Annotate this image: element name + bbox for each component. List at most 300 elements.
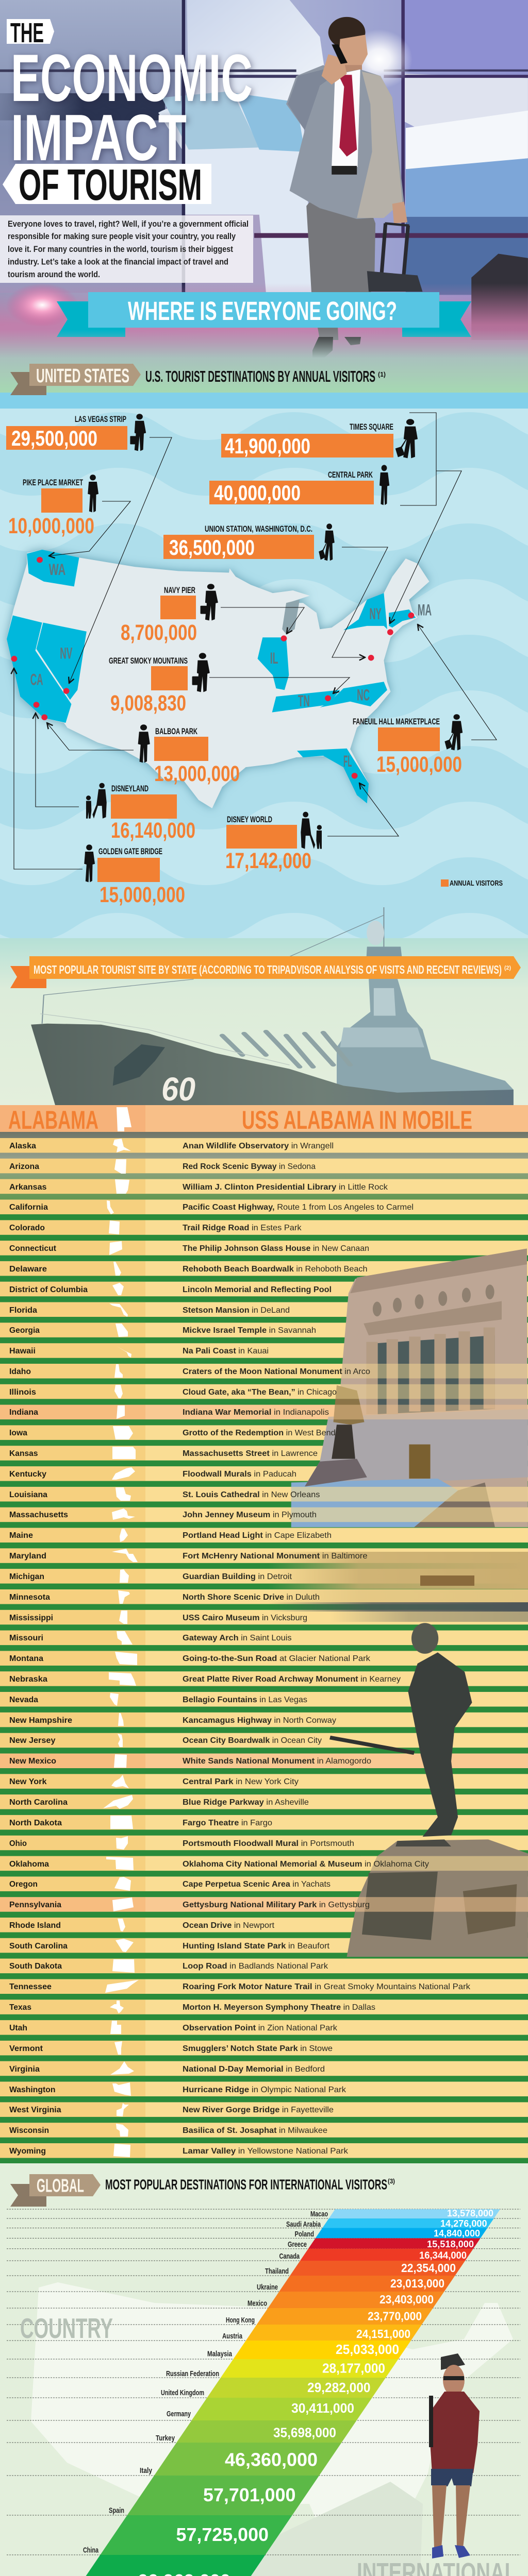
state: Massachusetts — [389, 609, 416, 628]
legend: annual visitors: ANNUAL VISITORS — [450, 879, 503, 888]
row: North Dakota — [9, 1816, 272, 1829]
title: THE: THE — [10, 18, 44, 48]
destination: Pike Place Market — [8, 474, 98, 538]
banner: United States — [10, 364, 141, 395]
row: Missouri — [9, 1631, 292, 1645]
row: Indiana: Indiana War Memorial in Indianapolis — [183, 1408, 329, 1417]
row: Arkansas: Arkansas — [9, 1183, 47, 1192]
row: Indiana — [9, 1405, 329, 1419]
row: Iowa: Iowa — [9, 1429, 27, 1437]
row: Idaho: Craters of the Moon National Monument in Arco — [183, 1367, 370, 1376]
banner: where is everyone going — [57, 292, 471, 337]
state labels: TN — [298, 691, 310, 710]
row: Maryland: Fort McHenry National Monument in Baltimore — [183, 1552, 368, 1561]
row: Minnesota: North Shore Scenic Drive in Duluth — [183, 1593, 320, 1602]
row: Nevada: Nevada — [9, 1696, 38, 1704]
row: Louisiana — [9, 1487, 320, 1501]
row: North Carolina: Blue Ridge Parkway in Asheville — [183, 1798, 309, 1807]
visitor counts: 29,282,000 — [307, 2380, 370, 2395]
destination: Central Park: 40,000,000 — [214, 481, 301, 505]
destination: Times Square: 41,900,000 — [225, 434, 310, 458]
state: California — [7, 615, 71, 723]
band: United States — [69, 2555, 265, 2576]
intro paragraph panel: Everyone loves to travel, right? Well, if you’re a government official — [8, 219, 249, 229]
row: Massachusetts: John Jenney Museum in Plymouth — [183, 1511, 317, 1519]
country labels: Mexico — [248, 2299, 267, 2308]
row: Vermont: Smugglers’ Notch State Park in Stowe — [183, 2044, 333, 2053]
country labels: Greece — [288, 2240, 307, 2249]
row: Kansas: Massachusetts Street in Lawrence — [183, 1449, 318, 1458]
band: Thailand — [290, 2261, 465, 2276]
table row backgrounds — [0, 1138, 528, 2158]
row: Montana: Montana — [9, 1654, 43, 1663]
visitor counts: 28,177,000 — [322, 2361, 385, 2376]
row: Texas: Texas — [9, 2003, 31, 2012]
row: California — [9, 1200, 414, 1214]
row: New Hampshire: New Hampshire — [9, 1716, 72, 1725]
photo: soldier statue on boulder — [330, 1623, 528, 1957]
country labels: Russian Federation — [166, 2369, 219, 2378]
row: Maine — [9, 1529, 332, 1542]
battleship section background — [0, 938, 528, 1108]
country labels: Saudi Arabia — [286, 2220, 321, 2229]
ship hull number 60: 60 — [161, 1071, 195, 1108]
visitor counts: 46,360,000 — [225, 2449, 318, 2470]
hero shoes — [312, 337, 361, 360]
row: Illinois — [9, 1385, 337, 1398]
row: Hawaii — [9, 1346, 269, 1358]
row: Delaware — [9, 1262, 368, 1276]
row: North Carolina: North Carolina — [9, 1798, 68, 1807]
visitor counts: 35,698,000 — [273, 2425, 336, 2440]
country labels: Turkey — [156, 2434, 175, 2443]
destination: Union Station: 36,500,000 — [169, 535, 255, 560]
row: New Hampshire — [9, 1713, 336, 1726]
row: Virginia — [9, 2061, 325, 2075]
row: Minnesota: Minnesota — [9, 1593, 50, 1602]
title: OF TOURISM: OF TOURISM — [19, 161, 202, 210]
destination: Disneyland — [86, 783, 195, 843]
row: California: California — [9, 1203, 48, 1212]
visitor counts — [63, 2208, 493, 2576]
row: Nebraska: Great Platte River Road Archway Monument in Kearney — [183, 1675, 401, 1684]
row: Kentucky: Kentucky — [9, 1470, 46, 1479]
state labels: CA — [30, 670, 43, 689]
chart: international visitors parallelogram bands — [29, 2209, 500, 2576]
country labels: Germany — [167, 2410, 191, 2418]
connector lines from destinations to map — [14, 413, 497, 869]
row: Ohio: Ohio — [9, 1839, 27, 1848]
row: District of Columbia — [9, 1283, 332, 1295]
destination: Disney World: DISNEY WORLD — [227, 815, 272, 824]
banner: where is everyone going: WHERE IS EVERYONE GOING? — [128, 296, 397, 326]
country labels: Malaysia — [207, 2349, 233, 2359]
country labels: United Kingdom — [161, 2388, 204, 2397]
destination: Las Vegas Strip — [6, 414, 146, 451]
row: Wyoming: Wyoming — [9, 2147, 46, 2156]
row: Connecticut: The Philip Johnson Glass House in New Canaan — [183, 1244, 369, 1253]
row: Nevada: Bellagio Fountains in Las Vegas — [183, 1696, 307, 1704]
row: South Dakota: Loop Road in Badlands National Park — [183, 1962, 328, 1971]
destination: Central Park — [209, 465, 389, 505]
row: Washington: Hurricane Ridge in Olympic National Park — [183, 2086, 346, 2094]
row: Florida: Stetson Mansion in DeLand — [183, 1306, 290, 1315]
row: Arizona: Arizona — [9, 1162, 39, 1171]
row: Alaska: Alaska — [9, 1142, 36, 1150]
axis label: country: COUNTRY — [20, 2312, 113, 2344]
visitor counts: 13,578,000 — [447, 2208, 493, 2218]
row: Rhode Island: Rhode Island — [9, 1921, 61, 1930]
row: New York: Central Park in New York City — [183, 1777, 299, 1786]
row: Florida: Florida — [9, 1306, 37, 1315]
hero background scene — [0, 0, 528, 393]
row: Kansas — [9, 1447, 318, 1459]
row: Pennsylvania: Pennsylvania — [9, 1901, 61, 1909]
row: Washington: Washington — [9, 2086, 56, 2094]
visitor counts: 57,701,000 — [203, 2484, 296, 2505]
band: Canada — [300, 2249, 473, 2261]
row: Tennessee: Roaring Fork Motor Nature Trail in Great Smoky Mountains National Park — [183, 1982, 471, 1991]
band: Germany — [192, 2398, 372, 2420]
row: Michigan — [9, 1569, 292, 1583]
row: Washington — [9, 2082, 346, 2096]
row: Nevada — [9, 1693, 307, 1706]
row: Georgia — [9, 1324, 316, 1337]
row: Kansas: Kansas — [9, 1449, 38, 1458]
location dots — [11, 557, 414, 778]
row: Arkansas: William J. Clinton Presidential Library in Little Rock — [183, 1183, 388, 1192]
row: District of Columbia: Lincoln Memorial and Reflecting Pool — [183, 1285, 332, 1294]
row: Oklahoma: Oklahoma — [9, 1860, 49, 1869]
row: Vermont — [9, 2041, 333, 2055]
destination: Las Vegas Strip: LAS VEGAS STRIP — [75, 414, 126, 424]
state: Nevada — [37, 623, 87, 700]
destination: Disney World: 17,142,000 — [225, 849, 311, 873]
rows: state names, icons and attractions — [9, 1139, 471, 2157]
row: Minnesota — [9, 1590, 320, 1604]
state: New York — [343, 593, 392, 634]
row: Nebraska: Nebraska — [9, 1675, 47, 1684]
row: Colorado — [9, 1221, 302, 1234]
state labels: WA — [49, 560, 65, 579]
destination: Times Square — [221, 419, 418, 458]
row: Mississippi: Mississippi — [9, 1614, 53, 1622]
row: Louisiana: Louisiana — [9, 1490, 47, 1499]
legend: annual visitors — [441, 879, 503, 888]
country labels: Ukraine — [257, 2283, 278, 2292]
row: South Carolina: South Carolina — [9, 1942, 68, 1951]
state labels: NC — [357, 686, 370, 704]
row: Delaware: Rehoboth Beach Boardwalk in Rehoboth Beach — [183, 1265, 368, 1274]
row: Michigan: Michigan — [9, 1572, 44, 1581]
row: Texas: Morton H. Meyerson Symphony Theatre in Dallas — [183, 2003, 375, 2012]
destination: Navy Pier: NAVY PIER — [164, 585, 195, 595]
row: Louisiana: St. Louis Cathedral in New Orleans — [183, 1490, 320, 1499]
row: Alaska: Anan Wildlife Observatory in Wrangell — [183, 1142, 334, 1150]
state: Florida — [297, 749, 369, 803]
map of the United States — [7, 550, 432, 808]
row: Maryland: Maryland — [9, 1552, 46, 1561]
band: China — [100, 2515, 292, 2555]
row: New Hampshire: Kancamagus Highway in North Conway — [183, 1716, 336, 1725]
destination: Golden Gate Bridge: 15,000,000 — [100, 883, 185, 907]
subtitle: most popular destinations — [105, 2176, 395, 2193]
destination: Union Station: UNION STATION, WASHINGTON, D.C. — [205, 524, 312, 534]
row: Georgia: Georgia — [9, 1326, 40, 1335]
row: Utah: Utah — [9, 2024, 27, 2032]
photo: landscape behind Michigan and Minnesota — [268, 1552, 528, 1622]
destination: Balboa Park — [138, 724, 240, 786]
row: Massachusetts — [9, 1509, 317, 1520]
destination: Golden Gate Bridge — [84, 844, 185, 907]
row: Connecticut: Connecticut — [9, 1244, 57, 1253]
banner: Global — [10, 2174, 101, 2207]
state: Washington — [27, 550, 79, 586]
section background: waves — [0, 409, 528, 938]
row: Georgia: Mickve Israel Temple in Savannah — [183, 1326, 316, 1335]
band: Ukraine — [279, 2276, 455, 2292]
global section background — [0, 2163, 528, 2576]
band: Greece — [308, 2238, 481, 2249]
green stripes behind table — [0, 1214, 528, 2163]
visitor counts: 24,151,000 — [356, 2327, 410, 2341]
row: Wyoming: Lamar Valley in Yellowstone National Park — [183, 2147, 349, 2156]
row: New York: New York — [9, 1777, 47, 1786]
row: Arizona — [9, 1159, 316, 1174]
destination: Golden Gate Bridge: GOLDEN GATE BRIDGE — [98, 846, 162, 856]
hero figure: businessman with phone and roller case — [286, 17, 423, 340]
country labels: Italy — [140, 2466, 153, 2475]
visitor counts: 23,403,000 — [380, 2293, 434, 2306]
row: South Carolina: Hunting Island State Park in Beaufort — [183, 1942, 330, 1951]
band: Poland — [316, 2228, 487, 2238]
state labels: FL — [343, 752, 352, 770]
visitor counts: 14,276,000 — [440, 2218, 487, 2229]
country labels: Macao — [310, 2210, 328, 2218]
row: Ohio — [9, 1836, 354, 1850]
row: New Jersey — [9, 1734, 322, 1747]
row: Iowa: Grotto of the Redemption in West Bend — [183, 1429, 336, 1437]
row: Iowa — [9, 1426, 336, 1439]
state: Illinois — [258, 637, 289, 690]
row: Oregon — [9, 1877, 331, 1891]
row: Oklahoma — [9, 1857, 429, 1870]
row: South Carolina — [9, 1939, 330, 1952]
intro paragraph panel: love it. For many countries in the world, tourism is their biggest — [8, 244, 233, 254]
visitor counts: 23,770,000 — [368, 2309, 422, 2323]
state: North Carolina — [320, 682, 387, 707]
state labels — [30, 560, 432, 770]
banner: most popular tourist site by state — [10, 956, 521, 988]
row: Mississippi: USS Cairo Museum in Vicksburg — [183, 1614, 307, 1622]
row: Oregon: Cape Perpetua Scenic Area in Yachats — [183, 1880, 331, 1889]
destination: Navy Pier — [121, 584, 218, 645]
row: Wyoming — [9, 2144, 349, 2157]
row: Nebraska — [9, 1672, 401, 1686]
row: Vermont: Vermont — [9, 2044, 43, 2053]
row: Kentucky: Floodwall Murals in Paducah — [183, 1470, 296, 1479]
row: Tennessee: Tennessee — [9, 1982, 52, 1991]
title: OF TOURISM — [3, 161, 211, 210]
row: Idaho: Idaho — [9, 1367, 31, 1376]
row: Maine: Maine — [9, 1531, 33, 1540]
destination: Balboa Park: BALBOA PARK — [155, 726, 197, 736]
row: Rhode Island — [9, 1919, 275, 1931]
row: Oregon: Oregon — [9, 1880, 38, 1889]
row: North Dakota: Fargo Theatre in Fargo — [183, 1819, 272, 1827]
row: District of Columbia: District of Columbia — [9, 1285, 88, 1294]
destination: Disneyland: 16,140,000 — [111, 818, 195, 843]
visitor counts: 23,013,000 — [390, 2277, 444, 2290]
visitor counts: 25,033,000 — [336, 2342, 399, 2357]
row: Virginia: Virginia — [9, 2065, 40, 2074]
country labels: Thailand — [265, 2267, 289, 2276]
destination: Navy Pier: 8,700,000 — [121, 620, 197, 645]
visitor counts: 22,354,000 — [401, 2261, 456, 2275]
row: Maine: Portland Head Light in Cape Elizabeth — [183, 1531, 332, 1540]
band: Spain — [127, 2476, 319, 2515]
country labels — [8, 2210, 328, 2576]
row: Maryland — [9, 1549, 368, 1562]
band: Macao — [329, 2209, 500, 2218]
row: Wisconsin: Wisconsin — [9, 2126, 49, 2135]
row: Hawaii: Hawaii — [9, 1347, 36, 1355]
state labels: MA — [418, 601, 432, 619]
state labels: NY — [369, 604, 382, 623]
row: South Dakota: South Dakota — [9, 1962, 62, 1971]
row: Michigan: Guardian Building in Detroit — [183, 1572, 292, 1581]
destination: Union Station — [163, 523, 335, 561]
intro paragraph panel: industry. Let’s take a look at the financial impact of travel and — [8, 257, 228, 267]
row: Colorado: Trail Ridge Road in Estes Park — [183, 1224, 302, 1232]
banner: most popular tourist site by state: (2) — [504, 965, 511, 971]
destination: Faneuil Hall Marketplace: FANEUIL HALL MARKETPLACE — [353, 717, 440, 726]
row: New Mexico: New Mexico — [9, 1757, 56, 1766]
country labels: China — [83, 2546, 98, 2554]
row: Texas — [9, 2001, 375, 2013]
destination: Faneuil Hall Marketplace: 15,000,000 — [376, 752, 462, 777]
row: Hawaii: Na Pali Coast in Kauai — [183, 1347, 269, 1355]
row: North Carolina — [9, 1795, 309, 1809]
row: Montana — [9, 1652, 371, 1665]
row: Wisconsin — [9, 2124, 327, 2137]
row: Mississippi — [9, 1611, 307, 1624]
state labels: NV — [60, 644, 73, 663]
band: Italy — [154, 2443, 341, 2476]
battleship USS Alabama — [31, 907, 514, 1107]
country labels: Austria — [222, 2332, 242, 2341]
ship base and grass behind first rows — [0, 1132, 528, 1215]
faded map behind chart — [31, 2282, 513, 2576]
subtitle: U.S. tourist destinations — [145, 367, 386, 385]
destination: Central Park: CENTRAL PARK — [328, 470, 373, 480]
row: Virginia: National D-Day Memorial in Bedford — [183, 2065, 325, 2074]
row: New Jersey: Ocean City Boardwalk in Ocean City — [183, 1736, 322, 1745]
destination: Times Square: TIMES SQUARE — [350, 422, 393, 432]
row: New Mexico — [9, 1754, 371, 1768]
row: Utah — [9, 2021, 338, 2034]
row: Colorado: Colorado — [9, 1224, 45, 1232]
row: Massachusetts: Massachusetts — [9, 1511, 68, 1519]
row: Idaho — [9, 1364, 370, 1378]
destination: Great Smoky Mountains: GREAT SMOKY MOUNTAINS — [109, 656, 188, 666]
band: Russian Federation — [221, 2359, 398, 2378]
intro paragraph panel: tourism around the world. — [8, 269, 100, 279]
row: Pennsylvania: Gettysburg National Military Park in Gettysburg — [183, 1901, 370, 1909]
row: Missouri: Gateway Arch in Saint Louis — [183, 1634, 292, 1642]
destination: Faneuil Hall Marketplace — [353, 714, 463, 777]
destination: Disneyland: DISNEYLAND — [111, 784, 148, 793]
visitor counts: 14,840,000 — [434, 2228, 480, 2239]
banner: Global: GLOBAL — [37, 2175, 84, 2196]
translucent rows over the memorial — [291, 1364, 528, 1522]
row: Utah: Observation Point in Zion National Park — [183, 2024, 338, 2032]
row: West Virginia — [9, 2103, 334, 2116]
row: North Dakota: North Dakota — [9, 1819, 62, 1827]
row: Delaware: Delaware — [9, 1265, 47, 1274]
row: South Dakota — [9, 1959, 328, 1973]
row: New Mexico: White Sands National Monument in Alamogordo — [183, 1757, 371, 1766]
table heading: Alabama: ALABAMA — [8, 1106, 98, 1134]
row: Connecticut — [9, 1241, 369, 1255]
row: West Virginia: West Virginia — [9, 2106, 61, 2114]
destination: Las Vegas Strip: 29,500,000 — [11, 426, 97, 450]
row: Florida — [9, 1303, 290, 1317]
row: Montana: Going-to-the-Sun Road at Glacier National Park — [183, 1654, 371, 1663]
row: Wisconsin: Basilica of St. Josaphat in Milwaukee — [183, 2126, 327, 2135]
row: Illinois: Illinois — [9, 1388, 36, 1397]
subtitle: most popular destinations: (3) — [388, 2177, 395, 2185]
row: California: Pacific Coast Highway, Route 1 from Los Angeles to Carmel — [183, 1203, 414, 1212]
band: Hong Kong — [257, 2308, 433, 2325]
intro paragraph panel: responsible for making sure people visit your country, you really — [8, 231, 236, 241]
row: New York — [9, 1775, 299, 1788]
country labels: Hong Kong — [226, 2316, 255, 2325]
destination: Great Smoky Mountains — [109, 653, 210, 716]
destination: Disney World — [225, 812, 322, 873]
visitor counts: 30,411,000 — [291, 2400, 354, 2416]
banner: United States: UNITED STATES — [36, 365, 129, 387]
row: Alaska — [9, 1139, 334, 1153]
destination: Balboa Park: 13,000,000 — [154, 761, 240, 786]
row: Rhode Island: Ocean Drive in Newport — [183, 1921, 275, 1930]
band: Turkey — [176, 2420, 357, 2443]
visitor counts: 57,725,000 — [176, 2524, 269, 2545]
row: New Jersey: New Jersey — [9, 1736, 56, 1745]
intro paragraph panel — [0, 215, 253, 283]
title: IMPACT: IMPACT — [11, 101, 187, 174]
title: ECONOMIC: ECONOMIC — [11, 40, 253, 115]
photo: Indiana War Memorial — [291, 1248, 528, 1527]
visitor counts: 16,344,000 — [419, 2250, 467, 2261]
row: Illinois: Cloud Gate, aka “The Bean,” in Chicago — [183, 1388, 337, 1397]
backpacker figure — [429, 2353, 480, 2558]
table heading: Alabama — [0, 1105, 528, 1134]
country labels: Canada — [279, 2252, 300, 2261]
row: Arizona: Red Rock Scenic Byway in Sedona — [183, 1162, 316, 1171]
destination: Great Smoky Mountains: 9,008,830 — [110, 691, 186, 716]
row: Kentucky — [9, 1467, 296, 1480]
destination: Pike Place Market: PIKE PLACE MARKET — [23, 478, 83, 487]
row: Indiana: Indiana — [9, 1408, 38, 1417]
row: Tennessee — [9, 1980, 471, 1993]
row: Oklahoma: Oklahoma City National Memorial & Museum in Oklahoma City — [183, 1860, 429, 1869]
row: Ohio: Portsmouth Floodwall Mural in Portsmouth — [183, 1839, 354, 1848]
band: Malaysia — [233, 2341, 411, 2359]
translucent rows over the boulder — [356, 1856, 528, 1912]
state labels: IL — [270, 649, 278, 667]
state: Tennessee — [272, 690, 340, 713]
